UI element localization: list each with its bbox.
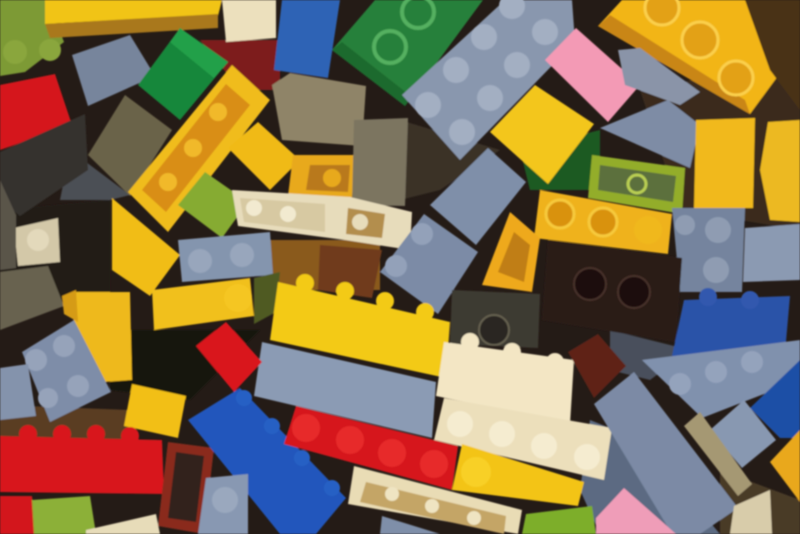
brick: lime bottom right (522, 506, 596, 534)
brick: grey-blue plate mid left (178, 232, 273, 282)
brick: yellow with rings (534, 190, 672, 254)
brick: grey left low (0, 266, 64, 330)
brick: grey-blue slab centre (430, 148, 526, 245)
brick: grey-blue far right (743, 224, 800, 282)
brick: olive dark small (254, 272, 280, 324)
brick: yellow upright left (72, 292, 132, 382)
brick: grey left small with cream (0, 180, 60, 270)
brick: red small (196, 322, 262, 392)
brick: cream top (222, 0, 276, 42)
brick: yellow top right (598, 0, 797, 114)
brick: translucent green plate (332, 0, 483, 106)
brick: blue long (188, 388, 346, 534)
brick: grey-blue tilted (380, 214, 478, 314)
brick: pink bottom (596, 488, 676, 534)
brick: yellow top (45, 0, 222, 24)
brick: olive-grey left (88, 95, 172, 196)
brick: gold far right (770, 430, 800, 502)
brick: grey-blue edge (0, 364, 36, 420)
brick: yellow wedge (112, 198, 180, 296)
brick: yellow upright right (694, 118, 755, 208)
brick: yellow far right (760, 120, 800, 222)
brick: grey-blue square right low (710, 400, 776, 468)
brick: big yellow centre (270, 274, 450, 378)
brick: grey-blue square left (22, 320, 111, 422)
brick: dark slate left (0, 114, 88, 216)
brick: yellow small low (124, 384, 186, 438)
brick: grey-blue wedge (600, 100, 700, 168)
brick: grey-blue bottom (198, 474, 248, 534)
brick: red studded (284, 406, 458, 490)
brick: blue right (672, 288, 790, 364)
brick: yellow square top centre (490, 85, 594, 184)
brick: yellow edge (62, 290, 78, 322)
brick: long yellow open (128, 65, 270, 232)
brick: small yellow (228, 122, 300, 190)
brick: grey-blue bottom centre (380, 516, 440, 534)
brick: yellow low centre (452, 444, 584, 506)
brick: dark red small (568, 334, 626, 398)
brick: gold open small (482, 212, 540, 292)
brick: dark far right top (745, 0, 800, 110)
brick: yellow flat left of centre (152, 278, 254, 330)
brick: dark red open (158, 442, 214, 534)
brick: lime bottom (32, 496, 96, 534)
brick: grey-olive upright (352, 118, 408, 206)
brick: grey-blue long (254, 342, 436, 438)
brick: cream stud top (436, 333, 574, 424)
brick: cream stud lower (434, 398, 612, 480)
brick: red long left (0, 425, 164, 494)
brick: grey-blue right of pink (618, 48, 700, 105)
brick: tan strip (684, 412, 752, 496)
brick: lime top left (0, 0, 64, 76)
brick: grey-blue plate right (642, 340, 800, 418)
brick: red corner (0, 496, 36, 534)
brick: grey-blue upper left (72, 35, 155, 106)
brick: grey-blue large plate (402, 0, 575, 160)
brick: tan-grey (272, 73, 366, 146)
brick: pink (545, 28, 640, 122)
brick: red left (0, 74, 72, 150)
brick: lime small (178, 172, 248, 238)
brick: grey-blue right (672, 208, 745, 292)
brick: cream bottom (86, 514, 160, 534)
brick: cream long open (232, 190, 412, 250)
brick: grey-blue long diagonal (594, 372, 738, 534)
brick: green (138, 28, 228, 120)
brick: cream open long (348, 466, 522, 534)
brick: dark translucent brown (542, 240, 682, 342)
brick: blue top (274, 0, 340, 78)
brick: dark translucent grey (450, 290, 540, 348)
brick: lime translucent (588, 155, 685, 214)
brick: blue far right (750, 360, 800, 438)
brick: cream bottom right (730, 490, 772, 534)
brick: brown translucent (318, 245, 382, 298)
brick: gold open (288, 155, 355, 200)
